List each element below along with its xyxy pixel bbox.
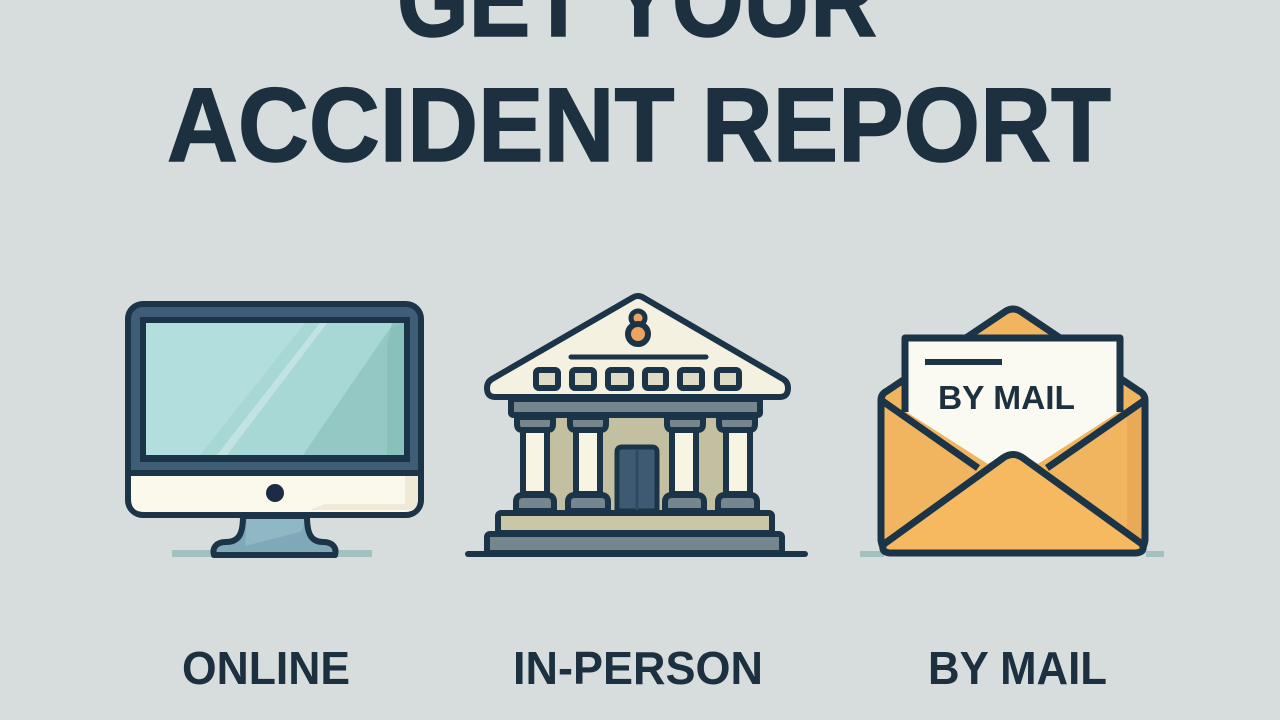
- door: [617, 447, 657, 511]
- icon: computer monitor: [128, 304, 421, 557]
- label: in-person: IN-PERSON: [513, 642, 763, 694]
- title: [167, 0, 1111, 184]
- letter text: BY MAIL: [938, 379, 1075, 416]
- label: online: ONLINE: [182, 642, 350, 694]
- label: by mail: BY MAIL: [928, 642, 1107, 694]
- steps: [498, 513, 772, 533]
- icon: open envelope with letter: [860, 309, 1164, 557]
- entablature: [511, 399, 760, 415]
- title: ACCIDENT REPORT: [167, 67, 1111, 184]
- icon: courthouse building: [468, 296, 805, 554]
- roof pediment: [487, 296, 788, 397]
- columns: [516, 417, 757, 511]
